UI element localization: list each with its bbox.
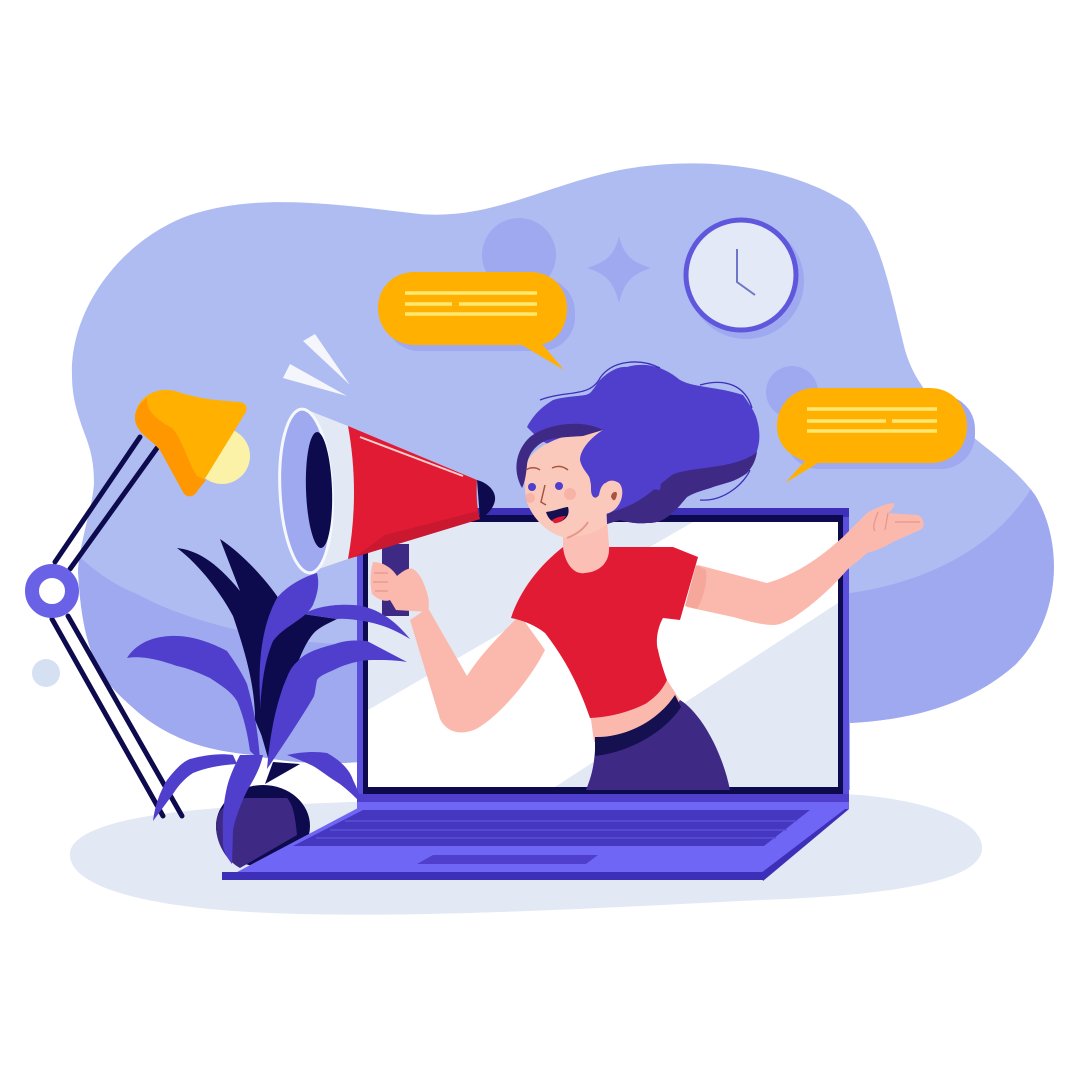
hair shadow	[607, 452, 757, 524]
neck	[563, 520, 610, 575]
touchpad	[417, 855, 598, 864]
waist	[590, 680, 680, 742]
wall clock	[686, 220, 804, 339]
fringe dark hair	[516, 424, 603, 488]
lamp arm	[52, 437, 182, 816]
eyes	[528, 483, 536, 491]
sparkle star	[587, 236, 651, 303]
brows and nose	[526, 466, 568, 505]
lamp bulb	[194, 428, 250, 484]
keyboard	[293, 810, 810, 846]
laptop screen	[357, 508, 849, 800]
megaphone	[276, 408, 495, 616]
darker lower blob band	[78, 489, 1054, 790]
sleeve shadow	[685, 565, 706, 609]
hair strands	[540, 362, 752, 500]
screen lower grey facet	[555, 603, 838, 787]
megaphone end cap	[477, 480, 495, 519]
lamp shade	[135, 390, 247, 496]
background blob	[72, 163, 1054, 790]
megaphone handle	[382, 544, 409, 616]
plant purple leaves	[260, 573, 318, 710]
plant lower leaves	[153, 754, 237, 821]
red shirt	[511, 547, 698, 718]
face	[525, 430, 607, 538]
trousers	[586, 700, 730, 790]
small dot	[32, 659, 60, 687]
speech bubble left	[378, 272, 575, 370]
illustration: woman with megaphone emerging from laptop	[25, 163, 1054, 914]
megaphone rays	[283, 334, 350, 396]
megaphone cone	[348, 426, 480, 559]
plant pot	[216, 785, 310, 867]
laptop base	[222, 794, 849, 881]
megaphone rim	[297, 409, 354, 573]
megaphone bell	[276, 408, 336, 574]
plant center dark leaf	[258, 614, 337, 765]
hand on handle	[371, 562, 429, 612]
jaw line	[567, 522, 588, 538]
blob circle right	[766, 366, 818, 418]
plant dark leaves	[177, 539, 300, 760]
mouth	[546, 507, 569, 522]
floor shadow	[70, 792, 982, 915]
front hair	[580, 410, 670, 498]
speech bubble right	[777, 388, 975, 483]
back arm	[687, 503, 924, 625]
hair back	[527, 365, 759, 524]
screen upper grey facet	[368, 522, 693, 710]
cheeks	[525, 493, 535, 503]
ear	[603, 481, 622, 514]
finger lines	[874, 512, 920, 531]
blob circle top	[482, 218, 556, 292]
woman	[410, 362, 924, 790]
front arm	[410, 608, 545, 732]
lamp joint	[32, 571, 72, 611]
plant	[127, 539, 410, 868]
desk lamp	[32, 390, 250, 816]
